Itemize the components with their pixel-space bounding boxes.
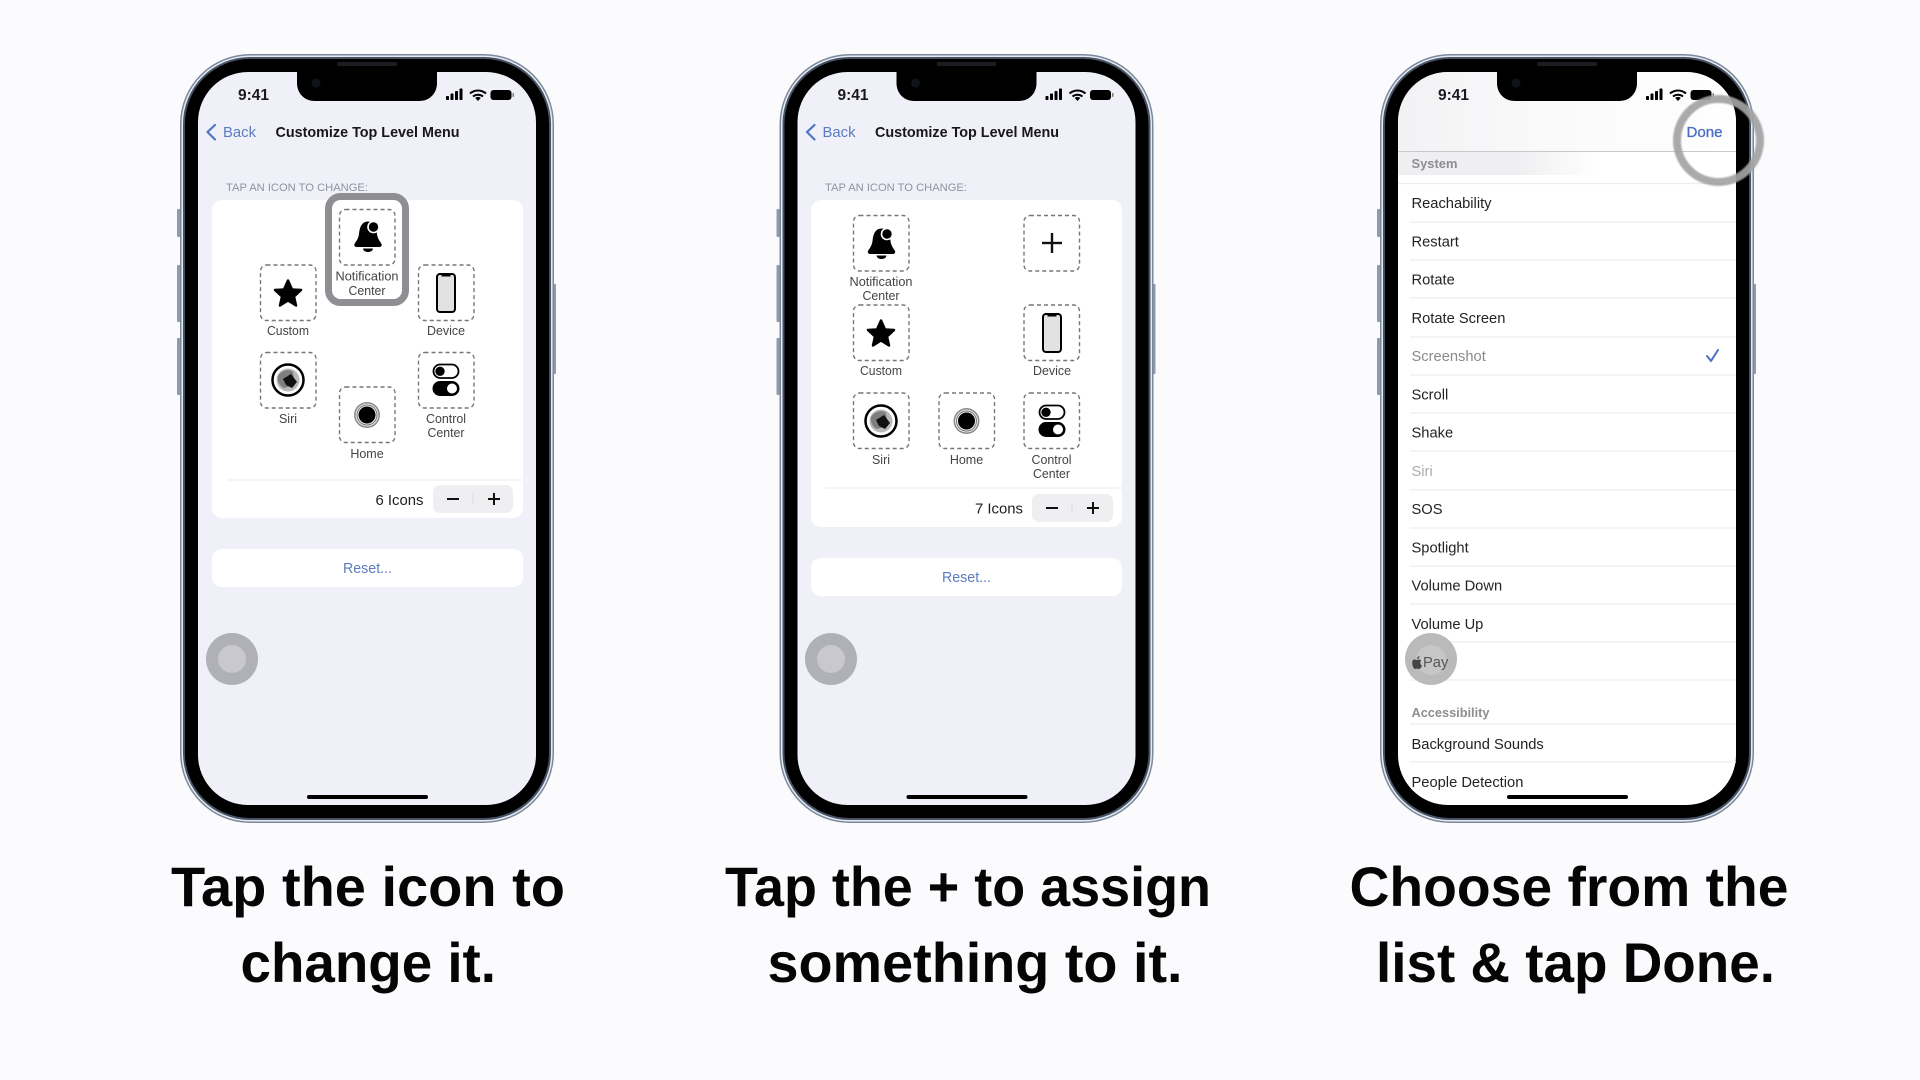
status bar 2: 9:41 bbox=[838, 87, 869, 104]
icon: home bbox=[939, 393, 994, 467]
screen 3 background bbox=[1398, 72, 1736, 805]
icon: notification center bbox=[336, 210, 399, 298]
caption 1: Tap the icon to bbox=[171, 855, 565, 918]
action list rows: SOS bbox=[1412, 502, 1443, 518]
icon card 1 bbox=[212, 200, 523, 518]
icon: home bbox=[340, 387, 395, 461]
icon: device bbox=[418, 265, 474, 338]
icon: device: Device bbox=[1033, 364, 1071, 378]
section heading: system: System bbox=[1412, 157, 1458, 171]
screen title 1: Customize Top Level Menu bbox=[276, 124, 460, 141]
highlight around notification center bbox=[328, 196, 406, 302]
action list rows bbox=[1410, 196, 1736, 680]
action list rows: Reachability bbox=[1412, 196, 1492, 212]
icon: control center bbox=[1024, 393, 1080, 481]
caption 3: Choose from the bbox=[1350, 855, 1788, 918]
action list rows: Scroll bbox=[1412, 387, 1448, 403]
screen title 2: Customize Top Level Menu bbox=[875, 124, 1059, 141]
icon: control center: Control bbox=[1032, 453, 1072, 467]
caption 1: change it. bbox=[240, 931, 496, 994]
section heading: accessibility: Accessibility bbox=[1412, 706, 1490, 720]
icon: control center: Control bbox=[426, 412, 466, 426]
section label 2: TAP AN ICON TO CHANGE: bbox=[825, 182, 967, 194]
icon count 1: 6 Icons bbox=[376, 492, 424, 509]
phone 3: action list bbox=[1377, 54, 1760, 823]
icon: custom bbox=[854, 305, 909, 378]
icon: home: Home bbox=[950, 453, 983, 467]
action list rows: Rotate Screen bbox=[1412, 311, 1505, 327]
highlight circle around done bbox=[1677, 99, 1760, 182]
caption 3 bbox=[1350, 855, 1788, 994]
accessibility rows: Background Sounds bbox=[1412, 737, 1544, 753]
caption 3: list & tap Done. bbox=[1376, 931, 1775, 994]
assistive touch button 1 bbox=[206, 633, 258, 685]
apple pay row bbox=[1412, 655, 1449, 671]
icon: control center: Center bbox=[1033, 467, 1070, 481]
caption 2: Tap the + to assign bbox=[725, 855, 1211, 918]
assistive touch button 2 bbox=[805, 633, 857, 685]
icon: notification center bbox=[850, 216, 913, 303]
action list rows: Spotlight bbox=[1412, 540, 1469, 556]
reset button 1: Reset... bbox=[343, 560, 392, 577]
stepper 1 bbox=[433, 485, 513, 513]
screen 2 background bbox=[798, 72, 1136, 805]
reset button 2 bbox=[811, 558, 1122, 596]
status bar 3: 9:41 bbox=[1438, 87, 1469, 104]
stepper 2 bbox=[1032, 494, 1113, 522]
status bar 1 bbox=[238, 87, 514, 104]
done button: Done bbox=[1686, 124, 1722, 141]
reset button 2: Reset... bbox=[942, 569, 991, 586]
action list rows: Volume Up bbox=[1412, 617, 1483, 633]
back button 1 bbox=[208, 124, 256, 141]
status bar 1: 9:41 bbox=[238, 87, 269, 104]
action list rows: Volume Down bbox=[1412, 578, 1502, 594]
icon: notification center: Center bbox=[348, 284, 386, 298]
status bar 2 bbox=[838, 87, 1114, 104]
action list rows: Siri bbox=[1412, 464, 1433, 480]
action list rows: Restart bbox=[1412, 234, 1459, 250]
action list rows: Rotate bbox=[1412, 272, 1455, 288]
icon count 2: 7 Icons bbox=[975, 500, 1023, 518]
icon: siri bbox=[854, 393, 909, 467]
caption 2: something to it. bbox=[768, 931, 1182, 994]
apple pay row: Pay bbox=[1423, 655, 1449, 671]
section label 1: TAP AN ICON TO CHANGE: bbox=[226, 182, 368, 194]
home indicator 1 bbox=[307, 795, 428, 799]
icon card 2 bbox=[811, 200, 1122, 527]
action list rows: Shake bbox=[1412, 426, 1453, 442]
back button 2 bbox=[807, 124, 856, 141]
icon: device: Device bbox=[427, 324, 465, 338]
reset button 1 bbox=[212, 549, 523, 587]
icon: control center: Center bbox=[428, 426, 464, 440]
caption 2 bbox=[725, 855, 1211, 994]
phone 2: customize menu with 7 icons bbox=[776, 54, 1156, 823]
screen 1 background bbox=[198, 72, 536, 805]
icon: siri bbox=[260, 352, 316, 426]
phone 1: customize menu with 6 icons bbox=[177, 54, 556, 823]
back button 2: Back bbox=[822, 124, 856, 141]
accessibility rows: People Detection bbox=[1412, 775, 1523, 791]
icon: control center bbox=[418, 352, 474, 440]
icon: custom: Custom bbox=[860, 364, 902, 378]
back button 1: Back bbox=[223, 124, 256, 141]
home indicator 2 bbox=[906, 795, 1028, 799]
checkmark bbox=[1707, 350, 1718, 361]
navigation bar bbox=[1398, 72, 1736, 151]
icon: custom: Custom bbox=[267, 324, 309, 338]
icon: siri: Siri bbox=[279, 412, 297, 426]
icon: notification center: Center bbox=[862, 289, 900, 303]
icon: siri: Siri bbox=[872, 453, 890, 467]
status bar 3 bbox=[1438, 87, 1714, 104]
icon: custom bbox=[260, 265, 316, 338]
action list rows: Screenshot bbox=[1412, 349, 1486, 365]
caption 1 bbox=[171, 855, 565, 994]
icon: plus slot bbox=[1024, 216, 1080, 271]
icon: notification center: Notification bbox=[850, 275, 913, 289]
assistive touch button 3 bbox=[1405, 633, 1457, 685]
accessibility rows bbox=[1410, 737, 1736, 791]
icon: device bbox=[1024, 305, 1080, 378]
home indicator 3 bbox=[1507, 795, 1628, 799]
icon: home: Home bbox=[350, 447, 384, 461]
icon: notification center: Notification bbox=[336, 270, 399, 284]
